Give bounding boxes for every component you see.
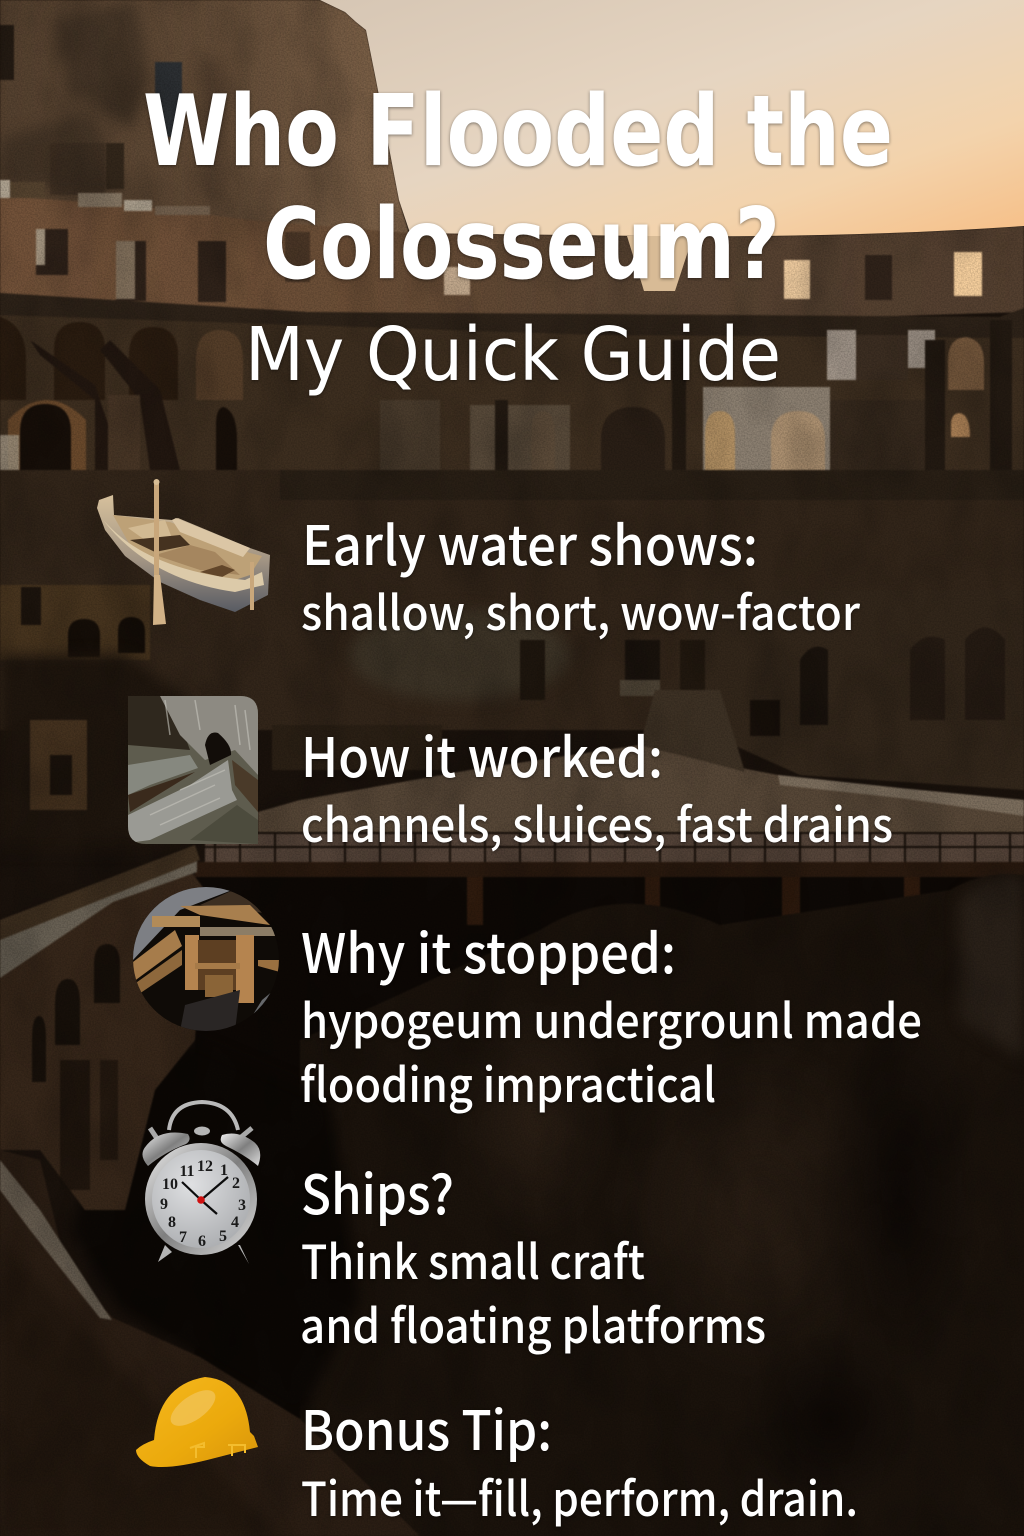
tower windows xyxy=(155,62,182,137)
lower piers xyxy=(8,400,86,482)
mid ground band xyxy=(0,470,1024,730)
dark lower arches xyxy=(20,404,897,500)
item: how it worked: channels, sluices, fast drains xyxy=(301,787,893,856)
item: bonus tip xyxy=(301,1387,858,1530)
item: why it stopped: flooding impractical xyxy=(300,1047,716,1116)
icon: alarm clock: 1 xyxy=(220,1162,228,1179)
oars xyxy=(154,482,159,577)
item: bonus tip: Bonus Tip: xyxy=(301,1387,552,1466)
ring windows xyxy=(36,229,892,302)
item: why it stopped xyxy=(300,910,922,1116)
left tower wall xyxy=(0,0,410,236)
item: early water shows: shallow, short, wow-factor xyxy=(301,575,861,644)
icon: alarm clock: 10 xyxy=(162,1176,178,1193)
distant arches center and right xyxy=(601,407,665,472)
icon: alarm clock: 3 xyxy=(238,1197,246,1214)
item: bonus tip: Time it—fill, perform, drain. xyxy=(301,1461,858,1530)
icon: sluice channel tile xyxy=(128,696,258,844)
dark wedge under the bridge xyxy=(70,1040,360,1420)
icon: alarm clock: 12 xyxy=(197,1158,213,1175)
masonry patches on the tower xyxy=(0,0,225,200)
dark columns xyxy=(495,320,1012,482)
sky windows xyxy=(784,260,810,299)
curved bridge wall xyxy=(0,870,205,1210)
slope left xyxy=(0,1150,420,1536)
understructure xyxy=(195,877,1024,1536)
item: ships xyxy=(300,1151,766,1357)
subtitle: My Quick Guide xyxy=(245,312,781,398)
icon: alarm clock: 2 xyxy=(232,1175,240,1192)
item: ships: Ships? xyxy=(301,1151,454,1230)
pale cornice stones xyxy=(0,180,210,215)
icon: yellow hard hat xyxy=(136,1377,258,1467)
icon: alarm clock: 4 xyxy=(231,1214,239,1231)
upper arches left xyxy=(0,317,243,400)
icon: alarm clock: 6 xyxy=(198,1233,206,1250)
icon: alarm clock xyxy=(142,1102,260,1264)
item: early water shows: Early water shows: xyxy=(302,502,758,581)
lower arcade band xyxy=(0,293,1024,482)
item: how it worked: How it worked: xyxy=(301,714,663,793)
title xyxy=(143,75,893,302)
icon: alarm clock: 11 xyxy=(179,1163,195,1180)
icon: timber frame disc xyxy=(133,887,280,1031)
railing and deck xyxy=(205,832,1024,862)
icon: alarm clock: 9 xyxy=(160,1196,168,1213)
arena floor xyxy=(258,745,1024,840)
left mid buildings xyxy=(0,585,190,850)
item: ships: Think small craft xyxy=(301,1224,645,1293)
right mid buildings xyxy=(272,590,1024,790)
icon: alarm clock: 8 xyxy=(168,1214,176,1231)
notch of sky in the ring wall xyxy=(627,236,693,291)
rock masses right xyxy=(300,874,1024,1536)
ring wall xyxy=(0,196,1024,322)
icon: alarm clock: 5 xyxy=(219,1228,227,1245)
sky, painted over the grain xyxy=(320,0,1024,236)
pale stone right side xyxy=(380,330,935,480)
item: ships: and floating platforms xyxy=(300,1288,766,1357)
item: why it stopped: Why it stopped: xyxy=(301,910,676,989)
title: Colosseum? xyxy=(263,188,780,302)
item: early water shows xyxy=(301,502,861,644)
icon: alarm clock: 7 xyxy=(179,1229,187,1246)
icon: wooden boat xyxy=(97,479,270,625)
vault shadows xyxy=(30,340,120,480)
item: why it stopped: hypogeum undergrounl made xyxy=(301,983,922,1052)
item: how it worked xyxy=(301,714,893,856)
